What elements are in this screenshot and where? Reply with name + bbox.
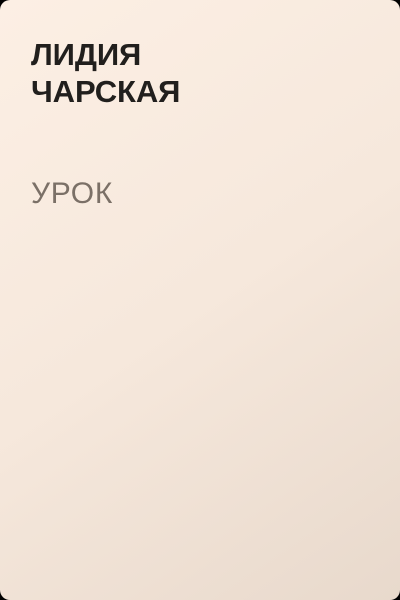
heading: author name [31, 37, 180, 109]
text block: book title: УРОК [31, 177, 113, 210]
heading: author name: ЧАРСКАЯ [31, 74, 180, 109]
heading: author name: ЛИДИЯ [31, 37, 141, 72]
